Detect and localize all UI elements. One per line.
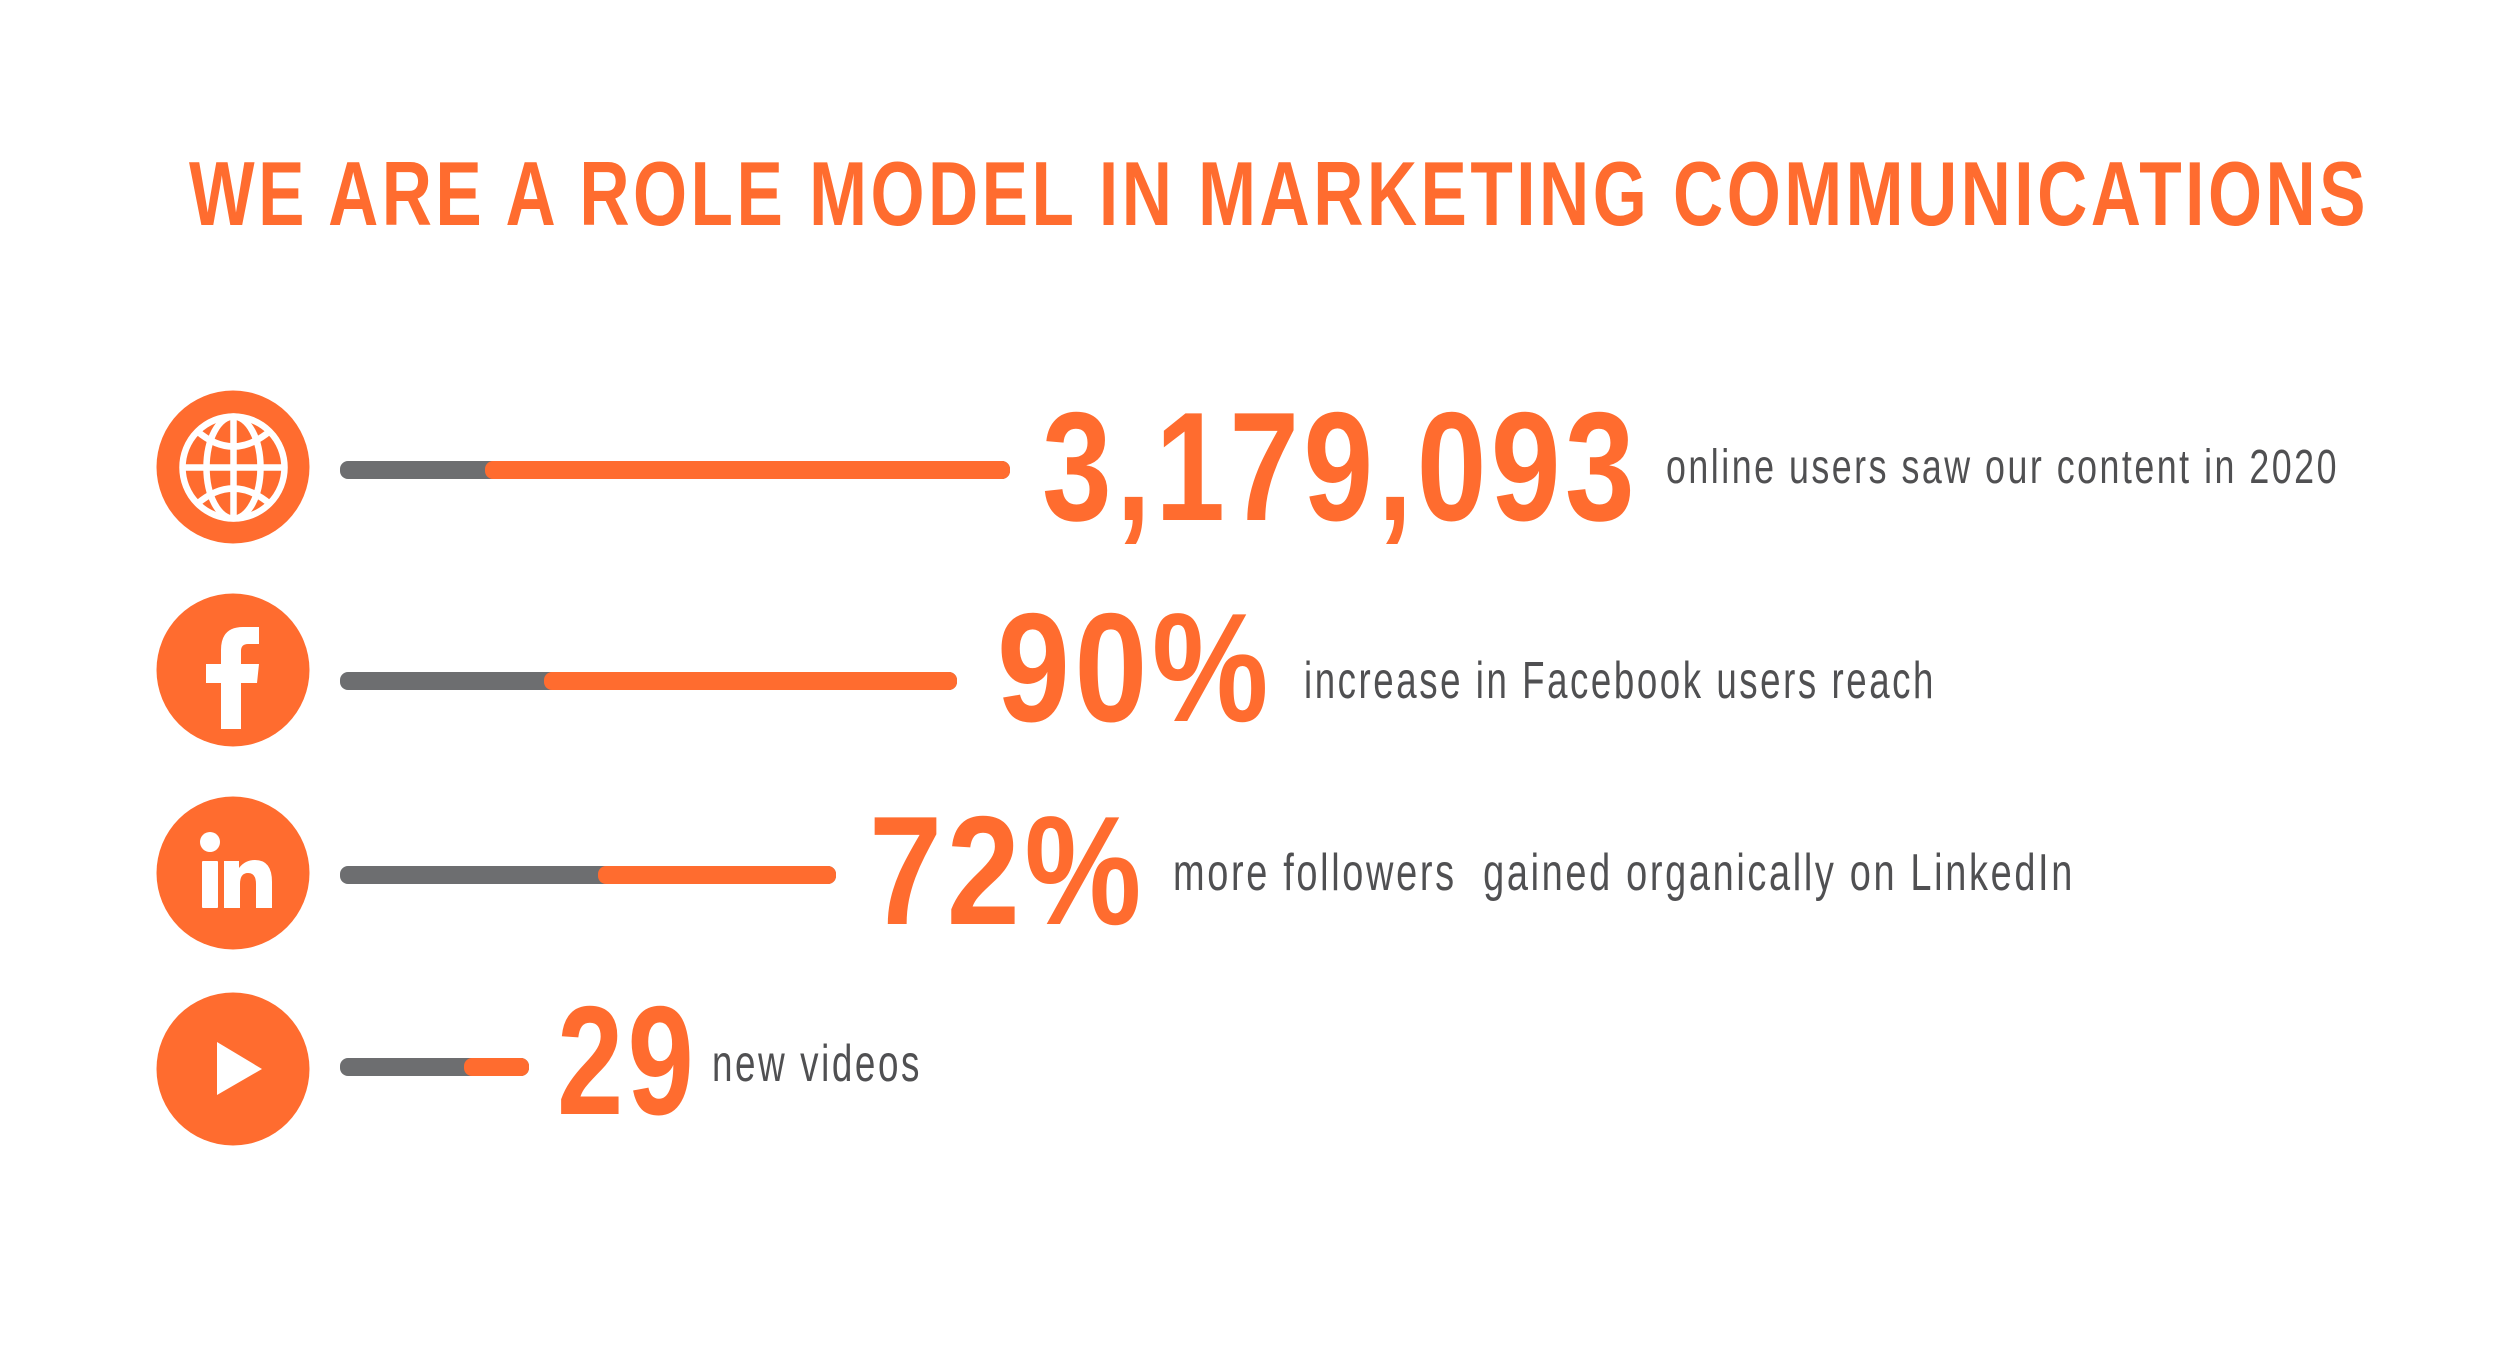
label: LinkedIn: more followers gained organically on LinkedIn	[1173, 844, 2075, 902]
row: online users	[156, 380, 2339, 553]
number: 3,179,093: 3,179,093	[1042, 380, 1639, 553]
label: Facebook: increase in Facebook users reach	[1304, 652, 1936, 710]
icon: LinkedIn	[156, 796, 310, 950]
progress bar: Facebook	[340, 672, 957, 690]
row: Facebook	[156, 581, 1936, 754]
row: videos	[156, 974, 922, 1147]
number: 29: 29	[557, 974, 698, 1147]
label: videos: new videos	[712, 1035, 922, 1093]
progress bar: online users	[340, 461, 1010, 479]
progress bar: videos	[340, 1058, 529, 1076]
icon: globe	[156, 390, 310, 544]
number: 72%: 72%	[869, 784, 1146, 957]
number: 90%: 90%	[997, 581, 1273, 754]
row: LinkedIn	[156, 784, 2075, 957]
progress bar: LinkedIn	[340, 866, 836, 884]
icon: Facebook	[156, 594, 310, 746]
icon: play	[156, 992, 310, 1146]
